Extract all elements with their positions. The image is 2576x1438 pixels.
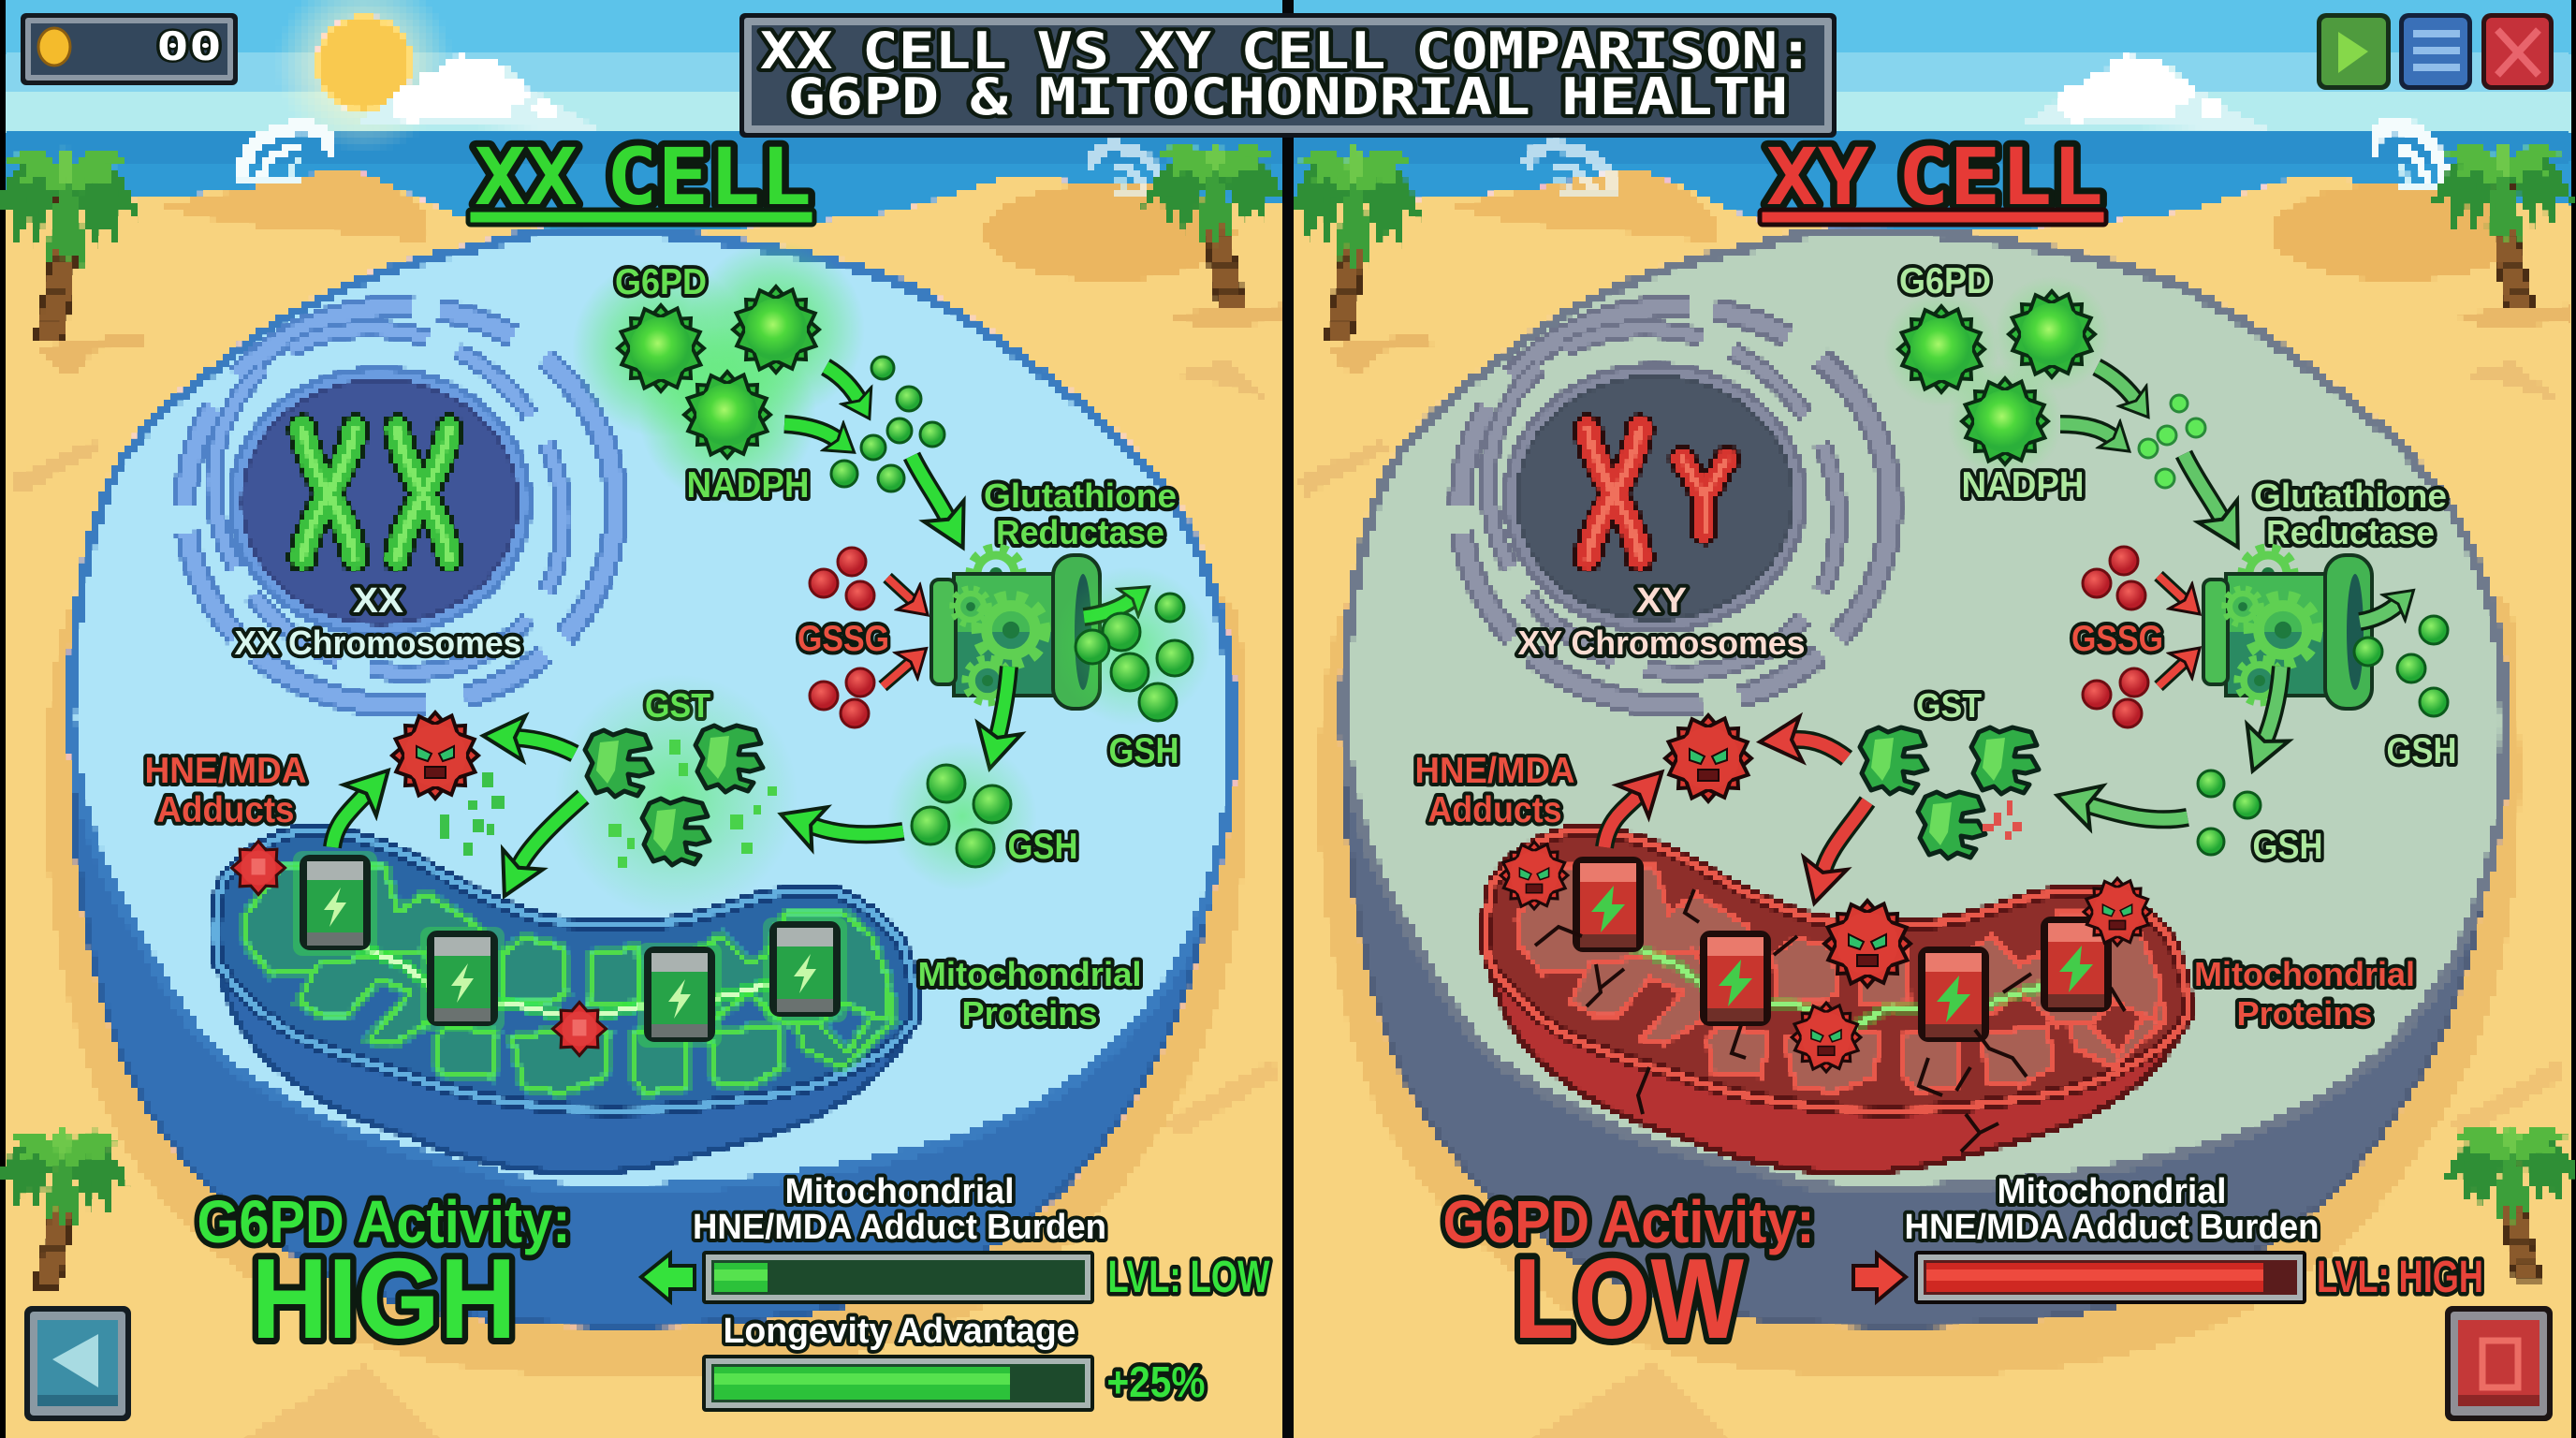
nucleus with endoplasmic reticulum and XY chromosomes xyxy=(1418,258,1909,743)
arrow: reductase down to GSH xyxy=(2265,667,2281,740)
arrow: mitochondrion to adduct xyxy=(332,795,365,847)
bar: adduct burden low xyxy=(702,1251,1094,1304)
heading: adduct burden: Mitochondrial xyxy=(1998,1172,2226,1211)
enemy: HNE/MDA adduct xyxy=(379,699,491,812)
arrow: GSH to GST xyxy=(812,826,903,834)
mitochondrion healthy xyxy=(215,829,915,1173)
GSH molecules upper xyxy=(2354,616,2448,716)
cell base xyxy=(73,599,1219,1325)
beach background left xyxy=(7,13,1282,1435)
arrow: GSSG in upper xyxy=(887,578,913,601)
heading: adduct burden: HNE/MDA Adduct Burden xyxy=(1904,1208,2320,1247)
G6PD activity readout xyxy=(1443,1188,1814,1362)
icon: coin xyxy=(38,28,70,66)
label: Mitochondrial Proteins xyxy=(917,955,1142,1033)
cell body xyxy=(70,231,1232,1189)
wave right panel right xyxy=(2375,125,2451,186)
beach underlay left xyxy=(6,0,1282,1438)
cell body xyxy=(1343,231,2505,1189)
label: HNE/MDA Adducts: HNE/MDA xyxy=(144,751,307,791)
label: Glutathione Reductase: Reductase xyxy=(2266,513,2435,551)
label: GSH lower: GSH xyxy=(2252,827,2323,867)
label: Mitochondrial Proteins: Proteins xyxy=(2237,994,2372,1033)
title box xyxy=(739,13,1837,138)
HUD: coin counter xyxy=(21,13,238,85)
label: G6PD: G6PD xyxy=(615,262,707,302)
bar: longevity advantage xyxy=(702,1355,1094,1412)
beach scene and cell body right xyxy=(1288,0,2576,1438)
palm top left xyxy=(1,149,133,342)
title line one: XX CELL VS XY CELL COMPARISON: xyxy=(760,22,1814,81)
panel: XX cell xyxy=(0,0,1288,1438)
mitochondrion damaged xyxy=(1486,829,2187,1173)
heading: adduct burden xyxy=(693,1172,1106,1247)
enemy: HNE/MDA adduct xyxy=(1652,702,1764,814)
heading: adduct burden: HNE/MDA Adduct Burden xyxy=(693,1208,1106,1247)
label: Glutathione Reductase: Glutathione xyxy=(2254,477,2447,515)
label: plus 25 percent: +25% xyxy=(1106,1357,1206,1406)
arrow: reductase to GSH xyxy=(1084,599,1133,617)
label: NADPH: NADPH xyxy=(687,465,809,506)
cell base xyxy=(1346,599,2492,1325)
heading: longevity advantage: Longevity Advantage xyxy=(723,1312,1076,1351)
wave right panel left xyxy=(1530,147,1619,193)
palm top left xyxy=(1295,149,1415,342)
G6PD activity readout: LOW xyxy=(1514,1235,1745,1362)
palm top right xyxy=(2438,144,2566,308)
bar: adduct burden high xyxy=(1914,1251,2306,1304)
label: HNE/MDA Adducts xyxy=(144,751,307,830)
palm bottom left xyxy=(4,1131,124,1288)
arrow: burden low xyxy=(641,1254,695,1301)
back button xyxy=(24,1306,131,1421)
center divider xyxy=(1282,0,1294,1438)
label: NADPH: NADPH xyxy=(1962,465,2084,506)
arrow: GST to adduct xyxy=(517,738,575,754)
GST enzymes xyxy=(554,674,798,917)
label: HNE/MDA Adducts xyxy=(1415,751,1574,830)
beach background right xyxy=(1294,52,2569,1435)
label: GSH upper: GSH xyxy=(2387,731,2456,771)
label: HNE/MDA Adducts: Adducts xyxy=(1428,790,1561,830)
GSH molecules lower xyxy=(887,741,1037,891)
palm bottom right xyxy=(2450,1126,2572,1280)
beach scene and cell body left xyxy=(0,0,1288,1438)
label: GSSG: GSSG xyxy=(2071,619,2163,659)
glutathione reductase machine xyxy=(2203,548,2372,709)
beach underlay right xyxy=(1294,0,2571,1438)
arrow: GST to adduct xyxy=(1793,740,1847,758)
label: GSH lower: GSH xyxy=(1007,827,1078,867)
panel: XY cell xyxy=(1288,0,2576,1438)
arrow: GST to mitochondrion xyxy=(520,797,583,866)
G6PD enzymes dim xyxy=(1883,276,2110,479)
arrow: G6PD to NADPH upper xyxy=(2097,367,2136,401)
label: Mitochondrial Proteins: Proteins xyxy=(962,994,1097,1033)
label: G6PD: G6PD xyxy=(1899,261,1991,301)
arrow: reductase down to GSH xyxy=(998,667,1009,736)
label: Mitochondrial Proteins xyxy=(2194,955,2415,1033)
sun xyxy=(275,0,453,153)
G6PD activity readout xyxy=(197,1188,571,1362)
arrow: GSSG in lower xyxy=(2159,662,2185,686)
label: GST: GST xyxy=(645,686,710,725)
button: close xyxy=(2481,13,2554,90)
wave left xyxy=(234,127,329,178)
G6PD activity readout: HIGH xyxy=(251,1235,517,1362)
glutathione reductase machine xyxy=(931,548,1100,709)
stop button xyxy=(2445,1306,2553,1421)
button: menu xyxy=(2399,13,2472,90)
arrow: G6PD to NADPH lower xyxy=(784,424,838,440)
G6PD enzymes xyxy=(572,241,865,504)
arrow: NADPH to glutathione reductase xyxy=(2184,454,2221,518)
menu buttons xyxy=(2317,13,2554,90)
cloud xyxy=(353,55,599,128)
arrow: NADPH to glutathione reductase xyxy=(912,456,947,518)
arrow: GSH to GST xyxy=(2089,805,2188,819)
label: XX Chromosomes: XX Chromosomes xyxy=(234,624,522,662)
arrow: GST to mitochondrion xyxy=(1823,801,1867,871)
arrow: mitochondrion to adduct xyxy=(1604,796,1638,847)
label: GST: GST xyxy=(1916,686,1982,725)
sand shadow around cell xyxy=(1346,623,2492,1348)
GSH molecules upper xyxy=(1053,566,1212,726)
label: HNE/MDA Adducts: Adducts xyxy=(157,790,294,830)
label: GSH upper: GSH xyxy=(1108,731,1179,771)
label: Glutathione Reductase: Reductase xyxy=(996,513,1164,551)
label: GSSG: GSSG xyxy=(798,619,889,659)
arrow: burden high xyxy=(1853,1254,1906,1301)
GSSG molecules xyxy=(2083,547,2148,727)
arrow: G6PD to NADPH upper xyxy=(826,367,859,401)
G6PD activity readout: G6PD Activity: xyxy=(1443,1188,1814,1255)
palm top right xyxy=(1150,144,1278,308)
coin count: 00 xyxy=(156,23,222,69)
label: level high: LVL: HIGH xyxy=(2317,1253,2483,1302)
heading: XX CELL: XX CELL xyxy=(475,131,812,223)
debris xyxy=(440,772,505,856)
button: play xyxy=(2317,13,2391,90)
NADPH dots few xyxy=(2139,395,2205,488)
arrow: GSSG in lower xyxy=(883,662,911,686)
NADPH dots xyxy=(831,357,944,492)
arrow: GSSG in upper xyxy=(2159,576,2185,600)
label: HNE/MDA Adducts: HNE/MDA xyxy=(1415,751,1574,791)
arrow: reductase to GSH xyxy=(2360,604,2398,622)
GSH molecules lower xyxy=(2198,770,2261,855)
label: XY Chromosomes: XY Chromosomes xyxy=(1518,624,1805,662)
title line two: G6PD & MITOCHONDRIAL HEALTH xyxy=(788,67,1788,126)
label: XY: XY xyxy=(1636,581,1687,621)
label: Glutathione Reductase xyxy=(984,477,1177,551)
GST enzymes damaged xyxy=(1860,727,2039,858)
label: Mitochondrial Proteins: Mitochondrial xyxy=(917,955,1142,993)
GSSG molecules xyxy=(810,548,874,727)
G6PD activity readout: G6PD Activity: xyxy=(197,1188,571,1255)
heading: adduct burden: Mitochondrial xyxy=(784,1172,1015,1211)
label: level low: LVL: LOW xyxy=(1108,1253,1270,1302)
sand shadow around cell xyxy=(73,623,1219,1348)
heading: adduct burden xyxy=(1904,1172,2320,1247)
cloud right xyxy=(2019,55,2265,128)
label: Glutathione Reductase xyxy=(2254,477,2447,551)
wave right xyxy=(1092,147,1168,193)
nucleus with endoplasmic reticulum and XX chromosomes xyxy=(143,258,634,743)
label: Mitochondrial Proteins: Mitochondrial xyxy=(2194,955,2415,993)
arrow: G6PD to NADPH lower xyxy=(2060,424,2114,438)
label: Glutathione Reductase: Glutathione xyxy=(984,477,1177,515)
heading: XY CELL: XY CELL xyxy=(1766,131,2103,223)
label: XX: XX xyxy=(353,581,404,621)
